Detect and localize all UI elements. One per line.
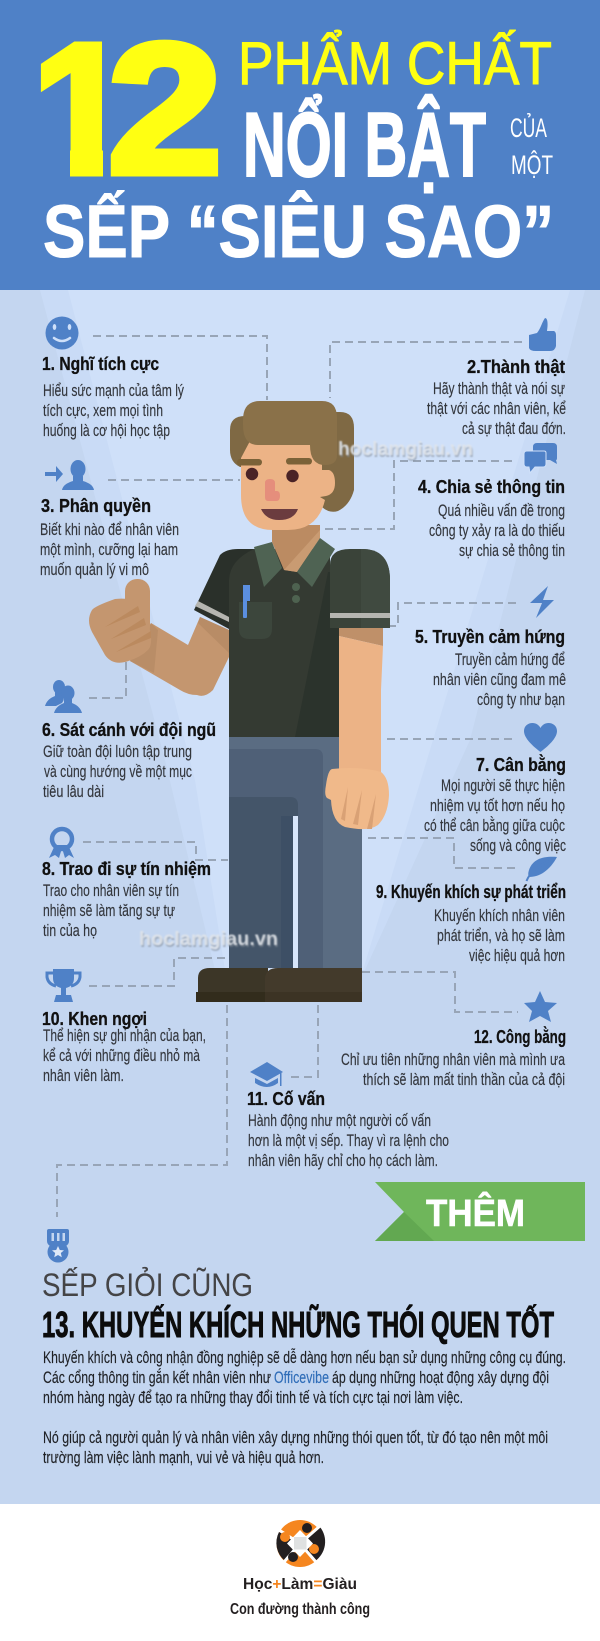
shirt buttons — [292, 583, 300, 603]
character illustration — [89, 401, 390, 1002]
heading: SẾP GIỎI CŨNG: SẾP GIỎI CŨNG — [42, 1267, 253, 1303]
item 3: delegation — [40, 460, 179, 579]
dashed connectors — [57, 336, 522, 1217]
icon: two people — [45, 680, 82, 713]
heading: 2.Thành thật — [467, 357, 565, 377]
pen — [243, 585, 250, 618]
watermarks: hoclamgiau.vn — [140, 931, 279, 952]
right sleeve — [330, 549, 390, 628]
heading: 10. Khen ngợi — [42, 1009, 147, 1029]
description — [43, 881, 179, 940]
face — [237, 441, 335, 530]
item 5: inspiration — [415, 586, 566, 709]
heading: 7. Cân bằng — [476, 754, 566, 775]
icon: chat bubbles — [524, 443, 557, 473]
ribbon: THÊM: THÊM — [426, 1191, 525, 1235]
heading: 6. Sát cánh với đội ngũ — [42, 720, 216, 740]
footer logo — [230, 1520, 370, 1618]
hair back — [230, 412, 354, 512]
item 10: praise — [42, 969, 206, 1085]
description: kể cả với những điều nhỏ mà — [43, 1046, 200, 1065]
eyes — [246, 468, 299, 482]
eyebrows — [237, 458, 312, 466]
description — [433, 650, 566, 709]
description — [424, 776, 566, 855]
hair top — [243, 401, 337, 465]
watermarks — [139, 439, 474, 952]
description — [427, 379, 566, 438]
watermarks: hoclamgiau.vn — [139, 929, 278, 950]
description: và cùng hướng về một mục — [44, 762, 192, 781]
icon: heart — [524, 723, 557, 752]
description: Trao cho nhân viên sự tín — [43, 881, 179, 900]
paragraph: Các cổng thông tin gắn kết nhân viên như — [43, 1368, 271, 1387]
heading: 3. Phân quyền — [41, 496, 151, 516]
icon: graduation cap — [250, 1062, 283, 1087]
description: tiêu lâu dài — [43, 782, 104, 801]
item 12: fairness — [341, 991, 566, 1089]
description — [341, 1050, 565, 1089]
icon: arrow and person — [45, 460, 94, 490]
tagline: Con đường thành công — [230, 1601, 370, 1618]
description — [40, 520, 179, 579]
right fist — [325, 768, 389, 829]
shoes — [196, 968, 362, 1002]
item 11: mentor — [247, 1062, 449, 1170]
item 1: positive thinking — [42, 316, 184, 440]
heading: 12. Công bằng — [474, 1026, 566, 1047]
icon: award ribbon — [49, 829, 74, 858]
title line PHẨM CHẤT: PHẨM CHẤT — [238, 30, 552, 97]
description — [43, 742, 192, 801]
icon: star — [524, 991, 557, 1022]
brand name: Học+Làm=Giàu — [243, 1576, 357, 1593]
description: nhân viên làm. — [43, 1066, 124, 1085]
mouth — [261, 509, 298, 520]
icon: thumbs up — [529, 318, 556, 351]
item 6: team — [42, 680, 216, 801]
icon: medal — [47, 1229, 69, 1262]
item 8: trust — [42, 829, 211, 940]
item 2: honesty — [427, 318, 566, 438]
description: việc hiệu quả hơn — [469, 946, 565, 965]
watermarks: hoclamgiau.vn — [338, 439, 473, 460]
description: Thể hiện sự ghi nhận của bạn, — [43, 1026, 206, 1045]
item 4: information sharing — [418, 443, 565, 560]
description: Giữ toàn đội luôn tập trung — [43, 742, 192, 761]
trousers — [229, 737, 362, 968]
description: huống là cơ hội học tập — [43, 421, 170, 440]
heading: 1. Nghĩ tích cực — [42, 354, 159, 374]
description — [248, 1111, 449, 1170]
right arm — [339, 628, 383, 775]
pocket — [239, 602, 272, 639]
title number 12: 1 — [32, 6, 132, 213]
description — [43, 381, 184, 440]
description: công ty như bạn — [477, 690, 565, 709]
neck — [272, 525, 320, 572]
item 9: growth — [376, 857, 566, 965]
bonus section — [42, 1229, 566, 1467]
description: Hiểu sức mạnh của tâm lý — [43, 381, 184, 400]
paragraph: Officevibe — [274, 1368, 329, 1387]
nose — [265, 479, 280, 501]
heading: 8. Trao đi sự tín nhiệm — [42, 859, 211, 879]
title number 12: 2 — [108, 6, 222, 213]
description: hơn là một vị sếp. Thay vì ra lệnh cho — [248, 1131, 449, 1150]
icon: leaf — [526, 857, 557, 881]
collar — [254, 538, 335, 587]
paragraph — [43, 1348, 566, 1467]
description: Hành động như một người cố vấn — [248, 1111, 431, 1130]
description — [43, 1026, 206, 1085]
left arm with thumbs up — [89, 579, 229, 696]
header banner — [0, 0, 600, 290]
watermarks: hoclamgiau.vn — [339, 441, 474, 462]
heading: 4. Chia sẻ thông tin — [418, 477, 565, 497]
heading: 11. Cố vấn — [247, 1089, 325, 1109]
description: nhân viên hãy chỉ cho họ cách làm. — [248, 1151, 438, 1170]
description: tin của họ — [43, 921, 97, 940]
description: nhiệm sẽ làm tăng sự tự — [43, 901, 175, 920]
title small MỘT: MỘT — [511, 149, 553, 180]
paragraph: trường làm việc lành mạnh, vui vẻ và hiệu quả hơn. — [43, 1448, 324, 1467]
title small CỦA: CỦA — [510, 111, 547, 143]
heading: 5. Truyền cảm hứng — [415, 627, 565, 647]
description — [429, 501, 565, 560]
icon: puzzle circle — [276, 1520, 325, 1567]
description — [434, 906, 565, 965]
description: tích cực, xem mọi tình — [43, 401, 163, 420]
description: muốn quản lý vi mô — [40, 560, 149, 579]
item 7: balance — [424, 723, 566, 855]
description: một mình, cưỡng lại ham — [40, 540, 178, 559]
description: Biết khi nào để nhân viên — [40, 520, 179, 539]
ribbon: THÊM — [375, 1182, 585, 1241]
icon: smiley — [46, 316, 78, 350]
title number 12 — [25, 6, 222, 213]
icon: trophy — [47, 969, 80, 1002]
icon: lightning bolt — [530, 586, 554, 618]
shirt — [194, 549, 339, 737]
